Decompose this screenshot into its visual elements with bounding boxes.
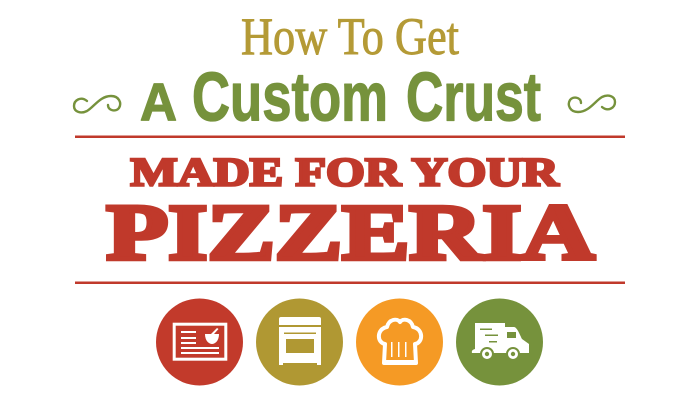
- icon: oven: [256, 298, 343, 386]
- top rule: [75, 136, 625, 138]
- title line 2: Crust: [406, 58, 541, 136]
- bottom rule: [75, 282, 625, 284]
- heading: made for your: MADE FOR YOUR: [130, 150, 560, 194]
- flourish right: [569, 96, 615, 112]
- icon: delivery truck: [456, 298, 543, 386]
- heading: pizzeria: PIZZERIA: [106, 190, 594, 277]
- icon: chef hat: [356, 298, 443, 386]
- icon: recipe card: [156, 298, 243, 386]
- flourish left: [74, 96, 120, 112]
- title line 2: Custom: [192, 58, 388, 136]
- title line 1: How To Get: [241, 8, 459, 66]
- title line 2: A: [140, 74, 177, 132]
- title line 2: [140, 58, 541, 136]
